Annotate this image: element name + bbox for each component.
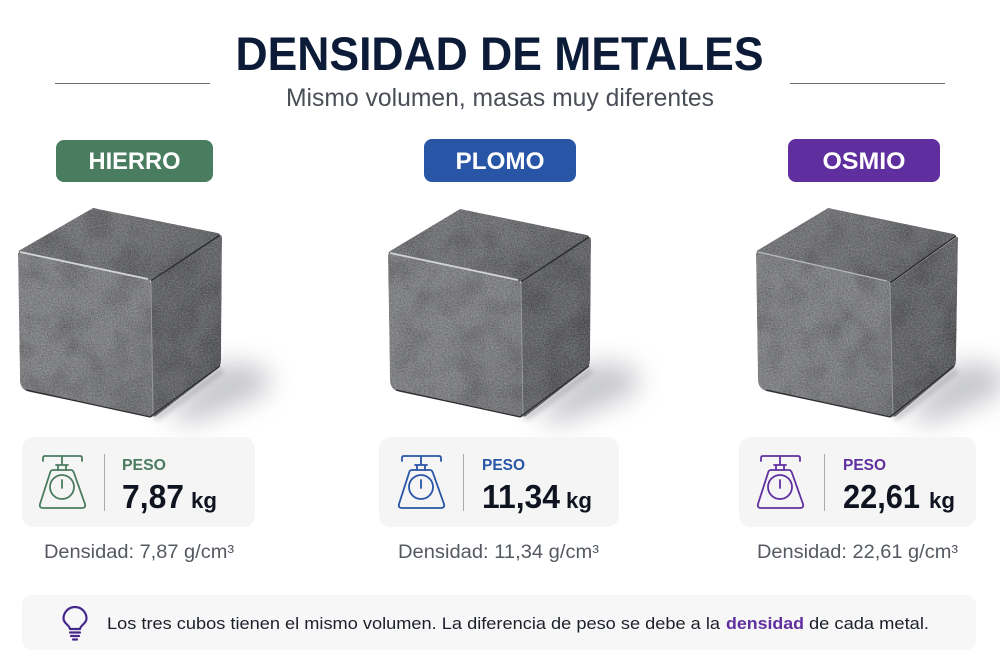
density: plomo: Densidad: 11,34 g/cm³ — [398, 542, 599, 563]
label: peso: PESO — [843, 457, 886, 474]
value: 7,87 kg — [122, 478, 217, 515]
icon: light bulb — [64, 607, 86, 640]
panel: plomo — [379, 139, 637, 563]
panel: osmio — [739, 139, 1000, 563]
badge: osmio: OSMIO — [822, 148, 906, 175]
icon: scale — [758, 456, 803, 508]
value: 7,87 kg: 7,87 — [122, 478, 184, 515]
cube: hierro — [18, 208, 268, 422]
card: hierro weight — [22, 437, 255, 527]
badge: osmio — [788, 139, 940, 182]
value: 22,61 kg: kg — [929, 488, 955, 513]
panel: hierro — [18, 140, 268, 563]
badge: hierro: HIERRO — [88, 148, 180, 175]
note text: de cada metal. — [809, 614, 929, 633]
density: osmio: Densidad: 22,61 g/cm³ — [757, 542, 958, 563]
cube: plomo — [388, 209, 637, 422]
title: DENSIDAD DE METALES — [236, 27, 764, 80]
value: 7,87 kg: kg — [191, 488, 217, 513]
badge: hierro — [56, 140, 213, 182]
card: osmio weight — [739, 437, 976, 527]
note text — [107, 614, 929, 633]
note text: densidad — [726, 614, 804, 633]
callout: note — [22, 595, 976, 650]
badge: plomo: PLOMO — [456, 148, 544, 175]
note text: Los tres cubos tienen el mismo volumen. La diferencia de peso se debe a la — [107, 614, 721, 633]
subtitle: Mismo volumen, masas muy diferentes — [286, 84, 714, 112]
value: 22,61 kg: 22,61 — [843, 478, 920, 515]
label: peso: PESO — [482, 457, 525, 474]
icon: scale — [40, 456, 85, 508]
card: plomo weight — [379, 437, 619, 527]
icon: scale — [399, 456, 444, 508]
badge: plomo — [424, 139, 576, 182]
value: 11,34 kg: 11,34 — [482, 478, 561, 515]
value: 11,34 kg: kg — [566, 488, 592, 513]
density: hierro: Densidad: 7,87 g/cm³ — [44, 542, 234, 563]
cube: osmio — [756, 208, 1000, 422]
label: peso: PESO — [122, 457, 166, 474]
